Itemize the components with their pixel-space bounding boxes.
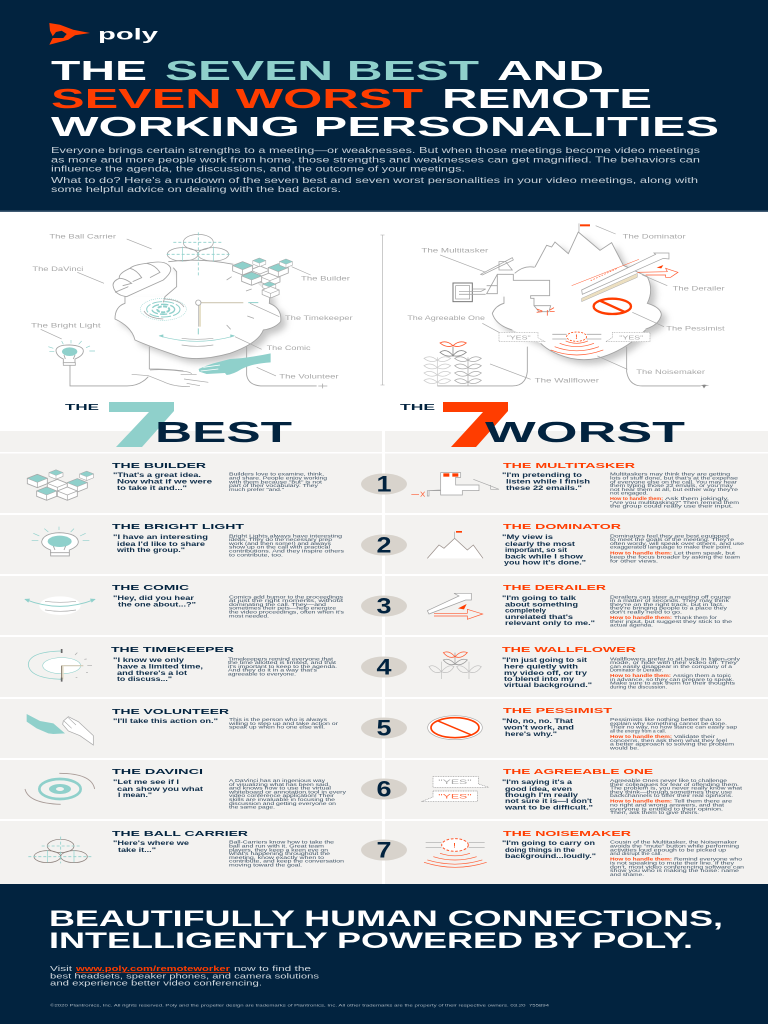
icon: bright light: [32, 527, 89, 556]
row: the multitasker: [502, 461, 739, 509]
header panel: [0, 0, 768, 212]
row: the wallflower: during the discussion.: [610, 684, 667, 689]
row: the volunteer: THE VOLUNTEER: [112, 707, 230, 716]
footer call to action: Visit: [50, 964, 72, 973]
row: the ball carrier: what's happening throughout the: [229, 851, 331, 856]
row: the comic: THE COMIC: [112, 583, 190, 592]
row: the timekeeper: "I know we only: [113, 657, 184, 664]
row: the comic: the video proceedings, often when it's: [229, 610, 345, 614]
row: the comic: the one about...?": [118, 602, 196, 608]
icon: wallflower bottom: [429, 662, 481, 679]
illustration: best personalities head: [31, 232, 354, 388]
row: the bright light: to contribute, too.: [229, 552, 283, 557]
row: the pessimist: Their no way, no how stance can easily sap: [610, 725, 738, 730]
row: the multitasker: How to handle them:: [610, 496, 664, 501]
row: the dominator: often wordy, will speak over others, and use: [610, 541, 745, 546]
labels: best personalities: [31, 233, 354, 380]
title: WORKING PERSONALITIES: [51, 111, 719, 142]
icon: volunteer hands: [132, 353, 271, 387]
row: the noisemaker: How to handle them:: [610, 857, 673, 862]
illustration: worst personalities head: [407, 223, 726, 388]
row: the noisemaker: [502, 829, 745, 877]
row: the pessimist: concerns, then ask them what they feel: [610, 738, 727, 743]
row: the pessimist: How to handle them:: [610, 734, 673, 739]
head shadow: [120, 265, 286, 363]
row: the builder: [112, 461, 328, 492]
row: the bright light: contributions. And they inspire others: [229, 548, 345, 554]
row: the wallflower: Assign them a topic: [673, 673, 732, 678]
footer call to action: and experience better video conferencing.: [50, 978, 262, 988]
icon: agreeable yes bubbles: [499, 332, 650, 342]
row: the timekeeper: And they do it in a way that's: [228, 668, 318, 673]
row: the davinci: A DaVinci has an ingenious way: [229, 778, 326, 783]
icon: pessimist: [428, 716, 482, 740]
row: the pessimist: here's why.": [505, 731, 557, 738]
heading: the 7 worst: [400, 402, 686, 449]
number badges: 5: [376, 716, 392, 740]
row: the dominator: for other views.: [610, 558, 658, 563]
row: the wallflower: in advance, so they can prepare to speak.: [610, 677, 734, 682]
row: the davinci: I mean.": [118, 792, 152, 799]
row: the wallflower: "I'm just going to sit: [502, 657, 588, 664]
row: the comic: dominating the call. They—and: [229, 602, 327, 607]
number badges: 3: [376, 594, 392, 618]
row: the multitasker: Multitaskers may think they are getting: [610, 472, 731, 477]
row: the davinci: discussion and getting everyone on: [229, 801, 337, 806]
row: the noisemaker: and disrupt the call.: [610, 851, 662, 856]
icon: multitasker: [411, 473, 499, 497]
row: the noisemaker: don't, most video conferencing software can: [610, 864, 745, 869]
number badges: 6: [376, 776, 392, 802]
labels: best personalities: The Comic: [267, 345, 312, 352]
row: the bright light: THE BRIGHT LIGHT: [112, 522, 245, 531]
head outline: [115, 260, 281, 359]
row: the wallflower: my video off, or try: [504, 670, 587, 677]
row: the pessimist: a better approach to solving the problem: [610, 742, 734, 747]
row: the wallflower: Dominator or Derailer.: [610, 668, 663, 673]
row: the ball carrier: "Here's where we: [113, 840, 189, 847]
row: the ball carrier: Ball-Carriers know how to take the: [229, 840, 335, 845]
labels: worst personalities: The Pessimist: [666, 326, 725, 333]
row: the bright light: "I have an interesting: [113, 534, 208, 541]
row: the pessimist: Pessimists like nothing better than to: [610, 717, 722, 722]
head fill: [492, 232, 661, 360]
row: the comic: at just the right moments, without: [229, 598, 344, 603]
footer call to action: best headsets, speaker phones, and camera solutions: [50, 972, 320, 980]
row: the volunteer: willing to step up and take action or: [229, 721, 339, 726]
row: the agreeable one: though I'm really: [505, 792, 578, 799]
row icons: best column: [24, 470, 96, 615]
row: the bright light: Bright Lights always have interesting: [229, 533, 343, 538]
row: the bright light: work (and then some!) and always: [229, 541, 332, 546]
row: the multitasker: THE MULTITASKER: [503, 461, 636, 470]
row: the dominator: keep the focus broader by asking the team: [610, 554, 740, 560]
icon: noisemaker: [551, 332, 603, 355]
row: the bright light: ideas. They do the necessary prep: [229, 537, 333, 542]
row: the derailer: unrelated that's: [505, 614, 573, 621]
intro text: as more and more people work from home, those strengths and weaknesses can get magnified. The behaviors can: [51, 156, 700, 164]
row: the timekeeper: THE TIMEKEEPER: [111, 645, 235, 654]
row: the multitasker: listen while I finish: [506, 478, 590, 486]
row: the dominator: exaggerated language to make their point.: [610, 545, 732, 550]
row: the pessimist: [502, 706, 738, 750]
row: the timekeeper: have a limited time,: [117, 664, 203, 670]
row: the wallflower: mode, or hide with their video off. They: [610, 660, 738, 665]
row: the agreeable one: not sure it is—I don't: [505, 798, 593, 805]
footer call to action: [50, 964, 320, 988]
row: the builder: Now what if we were: [117, 478, 212, 486]
row: the pessimist: all the energy from a call.: [610, 728, 666, 733]
row: the builder: with them because "but" is not: [229, 479, 323, 484]
row: the dominator: to meet the goals of the meeting. They're: [610, 537, 735, 542]
row: the derailer: they're bringing people to a place they: [610, 606, 728, 611]
icon: builder cubes: [233, 258, 292, 298]
heading: the 7 best: THE: [65, 402, 100, 412]
row: the agreeable one: Agreeable Ones never like to challenge: [610, 778, 728, 783]
row: the wallflower: Wallflowers prefer to sit back in listen-only: [610, 656, 741, 661]
row: the multitasker: the group could really use their input.: [610, 504, 733, 509]
head shadow: [498, 237, 667, 364]
icon: agreeable one: "YES": [438, 779, 473, 786]
row: the davinci: video conference application! Their: [229, 793, 335, 798]
row: the noisemaker: and shame.: [610, 872, 644, 877]
row: the timekeeper: the time allotted is limited, and that: [228, 660, 337, 665]
row: the ball carrier: ball and run with it. Great team: [229, 844, 324, 848]
number badges: [361, 472, 407, 862]
title: AND: [497, 55, 604, 86]
row: the agreeable one: [502, 767, 743, 815]
row: the agreeable one: The problem is, you never really know what: [610, 786, 743, 791]
row: the noisemaker: activities loud enough to be picked up: [610, 847, 727, 852]
row: the wallflower: virtual background.": [504, 682, 592, 689]
row: the wallflower: How to handle them:: [610, 673, 672, 678]
number badges: 4: [376, 654, 392, 680]
row: the comic: "Hey, did you hear: [113, 595, 195, 602]
icon: comic smile: [159, 334, 235, 346]
row: the davinci: "Let me see if I: [113, 779, 179, 786]
row: the multitasker: not hear them at all, but either way they're: [610, 487, 739, 492]
row: the multitasker: lots of stuff done, but that's at the expense: [610, 476, 739, 480]
row: the agreeable one: "I'm saying it's a: [502, 779, 572, 786]
icon: agreeable yes bubbles: "YES": [507, 335, 531, 341]
logo: poly: [49, 23, 158, 45]
copyright: ©2020 Plantronics, Inc. All rights reserved. Poly and the propeller design are trademarks of Plantronics, Inc. All other trademarks are the property of their respective owners. 03.20 755894: [50, 1002, 550, 1008]
icon: dominator: [427, 531, 483, 558]
row: the timekeeper: agreeable to everyone.: [228, 672, 296, 676]
row: the builder: part of their vocabulary. They: [229, 483, 319, 488]
footer call to action: now to find the: [234, 964, 311, 973]
row: the comic: [112, 583, 345, 618]
labels: worst personalities: The Multitasker: [421, 247, 490, 254]
row: the pessimist: explain why something cannot be done.: [610, 721, 727, 726]
row: the comic: most needed.: [229, 613, 269, 618]
row: the wallflower: can easily disappear in the company of a: [610, 664, 733, 669]
footer heading: INTELLIGENTLY POWERED BY POLY.: [49, 928, 693, 953]
row: the agreeable one: want to be difficult.": [504, 804, 593, 812]
intro text: some helpful advice on dealing with the bad actors.: [51, 185, 341, 194]
divider axis between illustrations: [380, 235, 384, 385]
intro text: influence the agenda, the discussions, and the outcome of your meetings.: [51, 164, 465, 174]
row: the dominator: important, so sit: [505, 547, 568, 554]
icon: agreeable one: "YES": [438, 794, 473, 801]
row: the bright light: idea I'd like to share: [117, 541, 205, 548]
row: the wallflower: [502, 645, 741, 689]
row: the multitasker: them typing those 22 emails, or you may: [610, 483, 734, 488]
row: the noisemaker: is not speaking to mute their line. If they: [610, 860, 735, 866]
footer heading: [49, 906, 723, 953]
icon: builder: [27, 470, 94, 500]
icon: comic: [24, 596, 96, 615]
row: the dominator: How to handle them:: [610, 551, 673, 556]
row: the agreeable one: their colleagues for fear of offending them.: [610, 782, 739, 787]
row: the agreeable one: Then, ask them to give theirs.: [610, 810, 699, 815]
row: the agreeable one: THE AGREEABLE ONE: [503, 767, 653, 776]
row: the agreeable one: good idea, even: [505, 786, 572, 793]
row: the dominator: Dominators feel they are best equipped: [610, 533, 730, 538]
row: the multitasker: Ask them jokingly,: [665, 496, 729, 501]
labels: worst personalities: The Derailer: [673, 285, 726, 292]
labels: worst personalities: The Agreeable One: [407, 315, 486, 322]
icon: davinci: [25, 773, 95, 804]
icon: derailer: [427, 593, 483, 619]
panel: grey background rows: [0, 431, 768, 884]
row: the agreeable one: everyone is entitled to their opinion.: [610, 806, 723, 811]
logo: poly: poly: [98, 26, 158, 44]
neck and shoulder lines: [70, 347, 317, 386]
row: the derailer: THE DERAILER: [503, 583, 607, 592]
labels: best personalities: The Ball Carrier: [49, 233, 117, 240]
row: the comic: sometimes their pets—help energize: [229, 606, 337, 611]
row: the builder: THE BUILDER: [112, 461, 207, 470]
title: REMOTE: [442, 83, 652, 114]
row: the multitasker: not engaged.: [610, 491, 648, 496]
icon: pessimist sign: [594, 299, 631, 314]
row: the wallflower: Make sure to ask them for their thoughts: [610, 681, 736, 686]
labels: worst personalities: The Wallflower: [535, 378, 600, 385]
row: the bright light: show up on the call with practical: [229, 545, 330, 550]
icon: agreeable one: [421, 777, 489, 802]
labels: best personalities: The Bright Light: [31, 323, 101, 330]
title: THE: [51, 55, 147, 86]
icon: volunteer: [27, 714, 93, 745]
row: the wallflower: to blend into my: [504, 676, 574, 683]
number badges: 2: [376, 532, 392, 558]
row: the agreeable one: Tell them there are: [674, 799, 733, 804]
row: the dominator: you how it's done.": [504, 560, 586, 566]
row: the volunteer: "I'll take this action on.": [113, 718, 218, 725]
row: the agreeable one: How to handle them:: [610, 799, 673, 804]
number badges: 7: [376, 838, 392, 862]
row: the builder: Builders love to examine, think,: [229, 472, 324, 477]
row: the multitasker: of everyone else on the call. You may hear: [610, 479, 738, 484]
icon: davinci aperture: [140, 298, 186, 320]
row: the timekeeper: Timekeepers remind everyone that: [228, 656, 334, 661]
row: the derailer: in a matter of seconds. They may think: [610, 598, 730, 603]
footer panel: [0, 884, 768, 1024]
row: the volunteer: This is the person who is always: [229, 717, 328, 722]
labels: worst personalities: The Dominator: [623, 233, 687, 240]
row: the derailer: [502, 583, 733, 628]
fist icon: [113, 262, 171, 297]
row icons: worst column: [411, 473, 499, 665]
row: the noisemaker: doing things in the: [505, 847, 575, 854]
icon: wallflower plants: [424, 342, 481, 386]
head outline: [492, 265, 661, 360]
row: the pessimist: won't work, and: [503, 724, 574, 732]
row: the pessimist: Validate their: [674, 734, 716, 739]
icon: dominator mountain: [535, 223, 623, 267]
row: the noisemaker: Cousin of the Multitasker, the Noisemaker: [610, 840, 738, 845]
footer heading: BEAUTIFULLY HUMAN CONNECTIONS,: [49, 906, 723, 931]
row: the derailer: completely: [505, 608, 546, 614]
row: the builder: to take it and...": [117, 485, 187, 492]
row: the bright light: with the group.": [116, 547, 185, 554]
intro text: What to do? Here's a rundown of the seven best and seven worst personalities in your video meetings, along with: [51, 176, 698, 185]
labels: best personalities: The Timekeeper: [285, 315, 354, 322]
row: the multitasker: "Are you multitasking?" Then remind them: [610, 500, 739, 505]
row: the ball carrier: meeting, know exactly when to: [229, 855, 325, 860]
row: the ball carrier: [112, 829, 345, 868]
icon: noisemaker: !: [575, 335, 577, 341]
row: the dominator: Let them speak, but: [674, 551, 736, 556]
row: the davinci: the same page.: [229, 805, 275, 810]
row: the agreeable one: they think—though sometimes they use: [610, 789, 733, 794]
row: the davinci: [112, 767, 347, 810]
intro text: Everyone brings certain strengths to a meeting—or weaknesses. But when those meetings become video meetings: [51, 146, 700, 155]
icon: timekeeper: [28, 649, 92, 682]
number badges: 1: [376, 472, 392, 496]
row: the ball carrier: players, they keep a keen eye on: [229, 847, 329, 852]
row: the derailer: about something: [505, 602, 578, 608]
heading: the 7 best: BEST: [155, 417, 293, 449]
row: the builder: "That's a great idea.: [113, 472, 201, 479]
row: the derailer: Derailers can steer a meeting off course: [610, 594, 732, 599]
labels: worst personalities: [407, 226, 726, 385]
row: the ball carrier: contribute, and keep the conversation: [229, 859, 345, 864]
footer call to action: www.poly.com/remoteworker: [74, 964, 230, 973]
row: the davinci: THE DAVINCI: [112, 767, 203, 776]
row: the builder: much prefer "and.": [229, 487, 285, 492]
row: the noisemaker: Remind everyone who: [674, 857, 743, 862]
icon: wallflower top: [443, 652, 467, 665]
row: the noisemaker: background...loudly.": [505, 853, 596, 860]
icon: derailer arrows: [572, 253, 678, 302]
icon: bright light bulb: [48, 340, 95, 365]
row: the ball carrier: moving toward the goal.: [229, 862, 302, 868]
row: the volunteer: speak up when no one else will.: [229, 725, 325, 730]
row: the derailer: How to handle them:: [610, 615, 673, 620]
labels: best personalities: The DaVinci: [32, 266, 83, 273]
row: the davinci: and knows how to use the virtual: [229, 786, 331, 791]
row: the timekeeper: and there's a lot: [117, 670, 188, 677]
row: the dominator: back while I show: [505, 554, 584, 560]
row: the wallflower: here quietly with: [504, 664, 578, 670]
intro text: [51, 146, 700, 194]
row: the davinci: whiteboard or annotation tool in every: [229, 789, 347, 794]
row: the derailer: relevant only to me.": [505, 620, 595, 627]
head fill: [115, 260, 281, 359]
heading: the 7 worst: WORST: [485, 417, 686, 449]
labels: worst personalities: The Noisemaker: [636, 369, 706, 376]
row: the ball carrier: take it...": [118, 847, 156, 854]
row: the davinci: skills are invaluable in focusing the: [229, 797, 336, 802]
row: the noisemaker: THE NOISEMAKER: [503, 829, 632, 838]
icon: noisemaker: !: [453, 843, 456, 850]
row: the pessimist: would be.: [610, 745, 639, 750]
row: the dominator: THE DOMINATOR: [503, 522, 622, 531]
row: the derailer: their input, but suggest they stick to the: [610, 619, 733, 624]
row: the agreeable one: no right and wrong answers, and that: [610, 802, 725, 808]
row: the dominator: "My view is: [502, 534, 553, 541]
row: the bright light: [112, 522, 345, 557]
row: the ball carrier: THE BALL CARRIER: [112, 829, 249, 838]
row: the noisemaker: "I'm going to carry on: [502, 840, 595, 847]
icon: ball carrier: [167, 232, 230, 277]
row: the agreeable one: backchannels to offer their real opinions.: [610, 793, 733, 798]
row: the noisemaker: show you who is making the noise: name: [610, 868, 740, 873]
row: the dominator: [502, 522, 745, 566]
icon: multitasker: [453, 258, 555, 316]
row: the multitasker: these 22 emails.": [506, 485, 582, 492]
title: SEVEN BEST: [165, 55, 479, 86]
icon: agreeable yes bubbles: "YES": [619, 335, 643, 341]
labels: best personalities: The Volunteer: [279, 373, 340, 380]
row: the builder: and share. People enjoy working: [229, 476, 328, 480]
labels: best personalities: The Builder: [301, 276, 351, 283]
icon: noisemaker: [424, 839, 487, 867]
row: the pessimist: THE PESSIMIST: [503, 706, 613, 715]
row: the derailer: actual agenda.: [610, 623, 653, 628]
icon: timekeeper clock: [196, 277, 258, 334]
row: the dominator: clearly the most: [505, 541, 576, 548]
row: the multitasker: "I'm pretending to: [502, 472, 582, 479]
heading: the 7 best: [65, 402, 293, 449]
row: the davinci: can show you what: [117, 786, 204, 793]
row: the davinci: of visualizing what has been said,: [229, 782, 330, 787]
icon: ball carrier: [28, 837, 92, 863]
row: the derailer: Thank them for: [674, 615, 718, 620]
row: the comic: Comics add humor to the proceedings: [229, 594, 344, 599]
row: the timekeeper: to discuss...": [117, 676, 172, 683]
row: the derailer: they're on the right track, but in fact,: [610, 602, 724, 607]
heading: the 7 worst: THE: [400, 402, 436, 412]
row: the pessimist: "No, no, no. That: [502, 718, 574, 725]
row: the derailer: "I'm going to talk: [502, 595, 576, 602]
title: [51, 55, 719, 142]
row: the noisemaker: avoids the "mute" button while performing: [610, 844, 740, 848]
row: the derailer: don't really need to go.: [610, 610, 682, 614]
row: the timekeeper: [111, 645, 337, 683]
row: the wallflower: THE WALLFLOWER: [502, 645, 637, 654]
title: SEVEN WORST: [51, 83, 423, 114]
row: the timekeeper: it's important to keep to the agenda.: [228, 664, 337, 669]
row: the volunteer: [112, 707, 339, 730]
